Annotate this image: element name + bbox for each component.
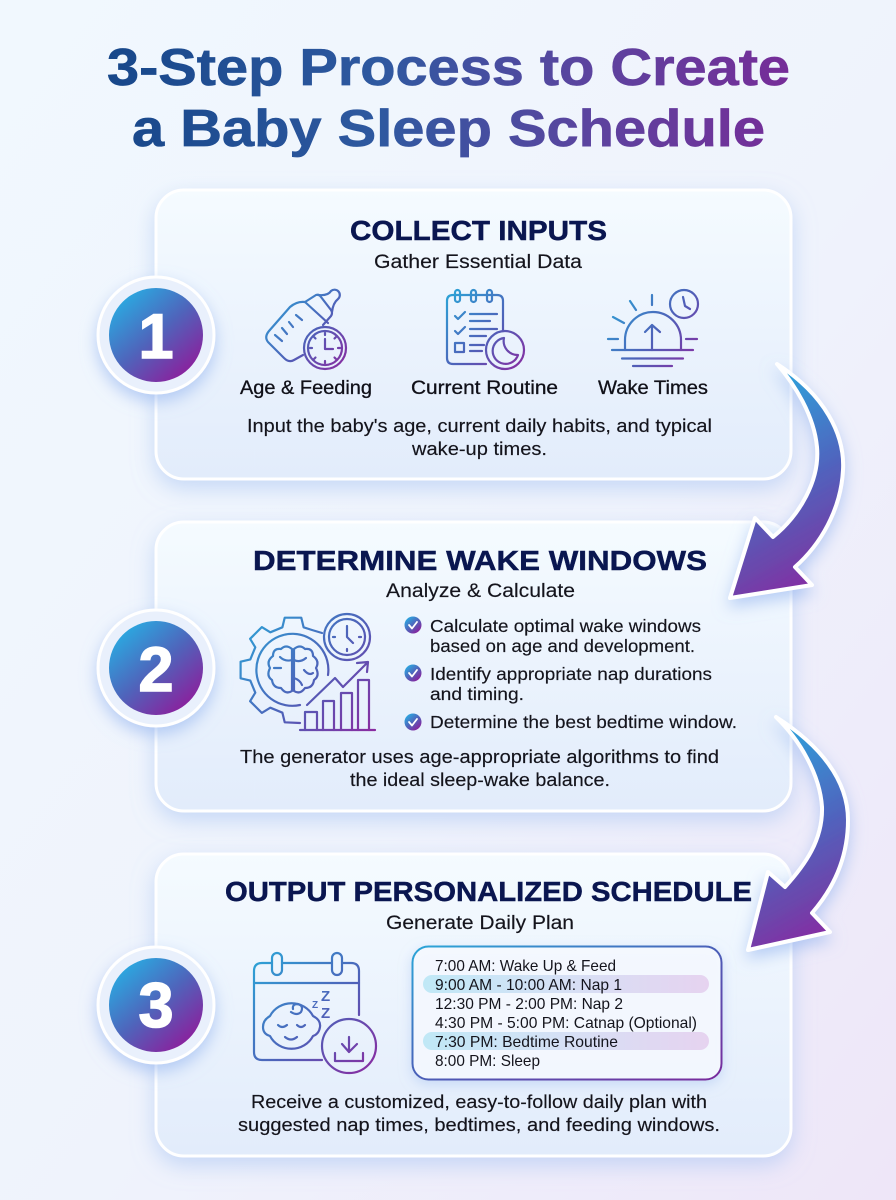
title: 3-Step Process to Create (107, 39, 790, 97)
description (240, 746, 719, 790)
check item 1: Calculate optimal wake windows (430, 616, 701, 636)
checklist (404, 616, 737, 732)
subheading: analyze and calculate: Analyze & Calculate (386, 581, 575, 602)
check item 1: based on age and development. (430, 636, 695, 656)
description: Input the baby's age, current daily habits, and typical (247, 415, 712, 436)
description: Receive a customized, easy-to-follow daily plan with (251, 1091, 707, 1112)
arrow: step 2 to step 3 (748, 717, 848, 950)
label: age and feeding: Age & Feeding (240, 378, 372, 399)
subheading: generate daily plan: Generate Daily Plan (386, 913, 574, 934)
check item 3: Determine the best bedtime window. (430, 712, 737, 732)
label: current routine: Current Routine (411, 378, 558, 399)
subheading: gather essential data: Gather Essential Data (374, 252, 582, 273)
icon: baby bottle with clock (266, 290, 346, 369)
check item 2 (404, 664, 712, 704)
icon: sleeping z letters: Z (321, 988, 330, 1005)
step badge 3 (98, 947, 214, 1063)
heading: output personalized schedule: OUTPUT PERSONALIZED SCHEDULE (225, 876, 752, 907)
description: suggested nap times, bedtimes, and feeding windows. (238, 1114, 720, 1135)
check item 2: Identify appropriate nap durations (430, 664, 712, 684)
title: a Baby Sleep Schedule (132, 100, 765, 158)
step badge 2: 2 (138, 635, 174, 705)
schedule entries: 4:30 PM - 5:00 PM: Catnap (Optional) (435, 1015, 697, 1032)
arrow: step 1 to step 2 (730, 364, 843, 598)
icon: gear brain clock and chart (241, 614, 375, 730)
heading: determine wake windows: DETERMINE WAKE WINDOWS (253, 545, 707, 576)
step badge 1: 1 (138, 302, 174, 372)
description (247, 415, 712, 459)
label: wake times: Wake Times (598, 378, 708, 399)
title (107, 39, 790, 158)
step badge 2 (98, 610, 214, 726)
schedule entries: 7:30 PM: Bedtime Routine (435, 1034, 618, 1051)
icon: checklist with moon (447, 290, 524, 369)
schedule entries: 12:30 PM - 2:00 PM: Nap 2 (435, 996, 623, 1013)
icon: sleeping z letters: Z (321, 1005, 330, 1022)
schedule entries (435, 958, 697, 1070)
highlight: bedtime routine (423, 1032, 709, 1050)
check item 1 (404, 616, 701, 656)
icon: calendar with sleeping baby and download (254, 953, 376, 1073)
schedule entries: 9:00 AM - 10:00 AM: Nap 1 (435, 977, 622, 994)
panel: collect inputs (156, 190, 791, 479)
highlight: nap 1 (423, 975, 709, 993)
schedule box (412, 946, 722, 1080)
check item 2: and timing. (430, 684, 524, 704)
description: wake-up times. (411, 438, 547, 459)
icon: sunrise with clock (608, 290, 698, 366)
heading: collect inputs: COLLECT INPUTS (350, 215, 607, 246)
description: the ideal sleep-wake balance. (350, 769, 610, 790)
panel: output personalized schedule (156, 854, 791, 1156)
description (238, 1091, 720, 1135)
icon: sleeping z letters (312, 988, 330, 1022)
icon: sleeping z letters: Z (312, 1000, 318, 1011)
step badge 3: 3 (138, 971, 174, 1041)
description: The generator uses age-appropriate algorithms to find (240, 746, 719, 767)
schedule entries: 7:00 AM: Wake Up & Feed (435, 958, 616, 975)
schedule entries: 8:00 PM: Sleep (435, 1053, 540, 1070)
panel: determine wake windows (156, 522, 791, 811)
step badge 1 (98, 277, 214, 393)
